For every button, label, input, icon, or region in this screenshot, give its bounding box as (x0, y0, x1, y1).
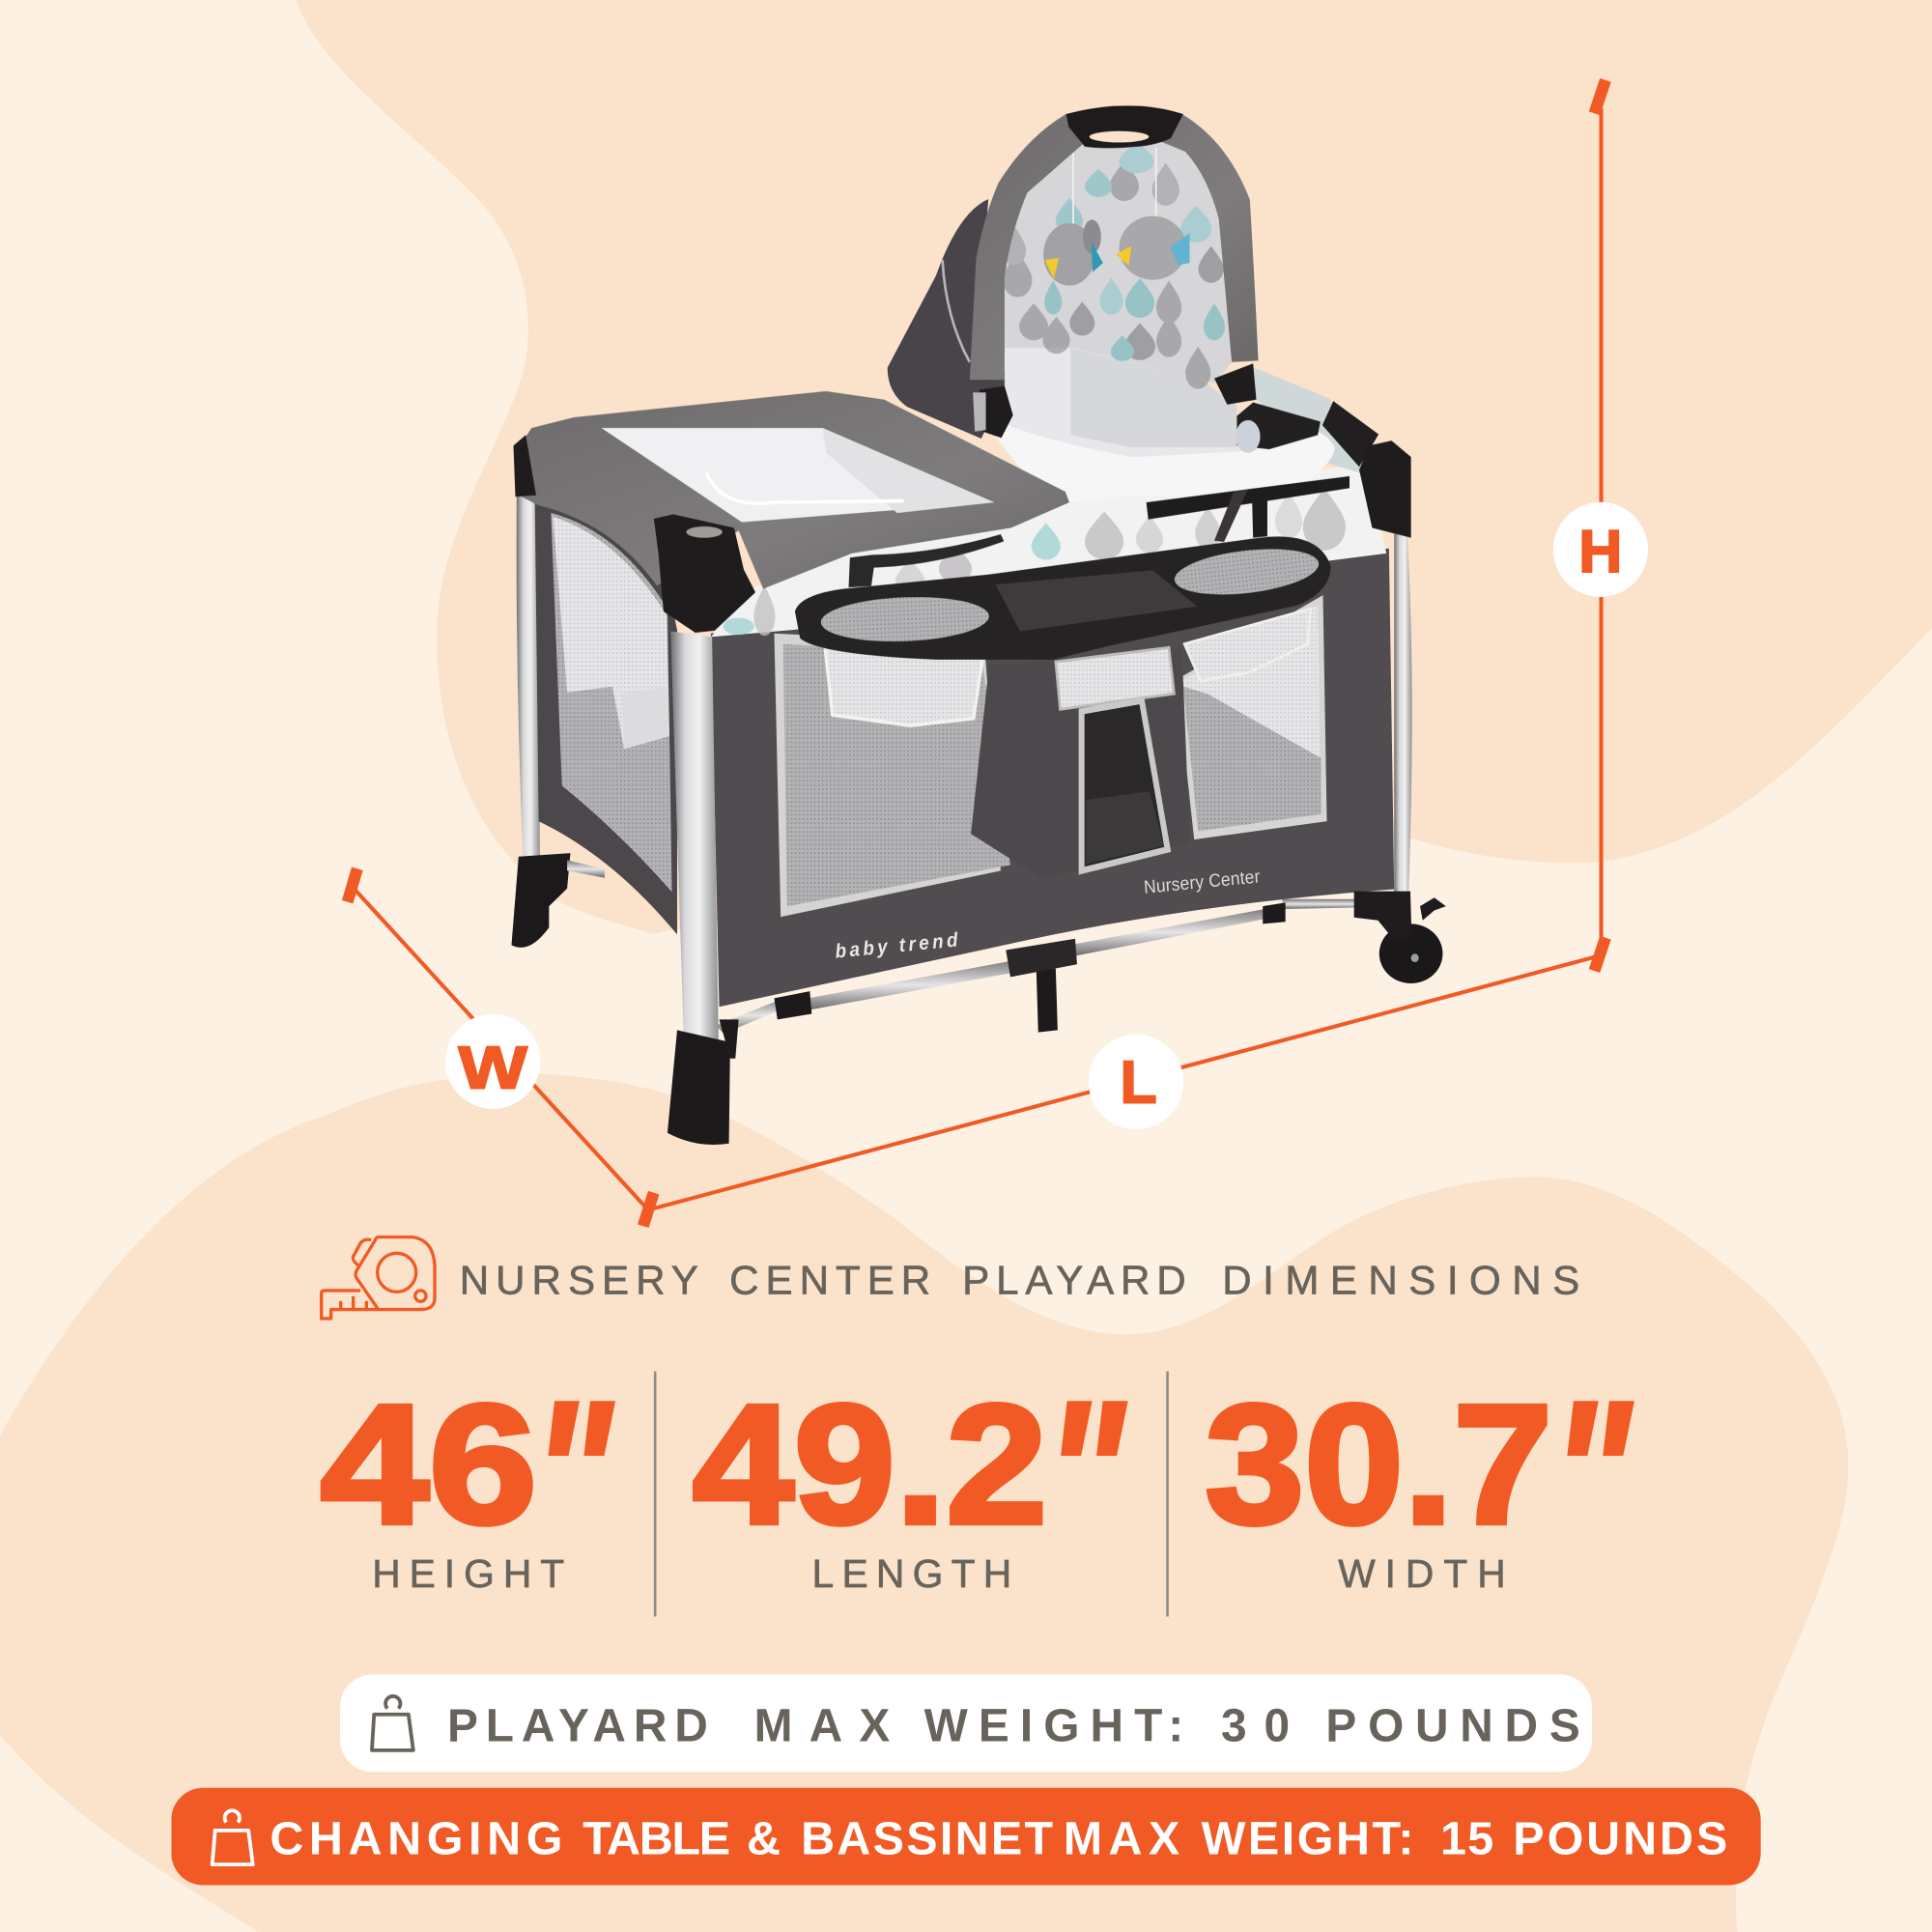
bar: changing table max weight: MAX (1064, 1813, 1186, 1865)
bassinet bar (1147, 476, 1350, 542)
basket right (1184, 609, 1311, 681)
far right leg (1394, 530, 1412, 899)
front corner cap (654, 514, 755, 633)
brand label: baby trend: baby trend (835, 929, 959, 963)
front fabric panel (711, 549, 1394, 1007)
arch brackets (973, 363, 1378, 467)
right corner cap (1359, 440, 1411, 538)
badge: L (1089, 1035, 1183, 1129)
icon: weight (372, 1696, 413, 1750)
divider (1166, 1372, 1169, 1616)
teal fabric right (1246, 367, 1363, 474)
rear rod (567, 860, 605, 878)
heading: PLAYARD (962, 1257, 1193, 1302)
corner highlight (686, 526, 723, 538)
side panel (535, 496, 677, 934)
front foot (668, 1030, 730, 1145)
bar: playard max weight: 30 (1221, 1700, 1307, 1751)
mesh window left (774, 634, 1010, 917)
badge: H (1553, 502, 1648, 597)
storage tray (795, 536, 1331, 660)
front leg (670, 632, 719, 1042)
icon: tape measure (322, 1237, 435, 1319)
badge: L: L (1120, 1049, 1157, 1117)
bar: playard max weight: WEIGHT: (924, 1700, 1194, 1751)
measurement: width: 30.7 (1205, 1371, 1552, 1560)
canopy fabric (1003, 141, 1232, 389)
measurement: length (693, 1357, 1127, 1596)
bar: changing table max weight: POUNDS (1513, 1813, 1730, 1865)
measurement: width: " (1550, 1357, 1634, 1591)
changing table (515, 391, 1069, 589)
measurement: width (1205, 1357, 1634, 1596)
measurement: height: HEIGHT (372, 1551, 564, 1596)
heading: NURSERY (460, 1257, 705, 1302)
center foot (1006, 939, 1077, 1033)
badge: W: W (458, 1034, 527, 1101)
badge: H: H (1578, 518, 1622, 585)
center pouch (971, 647, 1190, 879)
measurement: width: WIDTH (1338, 1551, 1506, 1596)
bar: changing table max weight: CHANGING (270, 1813, 568, 1865)
plush toys (1043, 216, 1190, 286)
mesh window right (1177, 595, 1327, 839)
canopy arch (970, 114, 1259, 380)
badge: W (445, 1014, 540, 1109)
measurement: height: 46 (321, 1371, 537, 1560)
bar: changing table max weight (171, 1788, 1761, 1886)
heading: DIMENSIONS (1222, 1257, 1591, 1302)
bar: changing table max weight: BASSINET (801, 1813, 1055, 1865)
patterned fabric band (711, 464, 1386, 637)
bar: playard max weight: MAX (754, 1700, 907, 1751)
product photo: playard (511, 105, 1446, 1145)
tray strut (848, 534, 1004, 587)
bar: playard max weight: POUNDS (1325, 1700, 1591, 1751)
canopy hood (888, 199, 1008, 439)
basket left (825, 644, 982, 725)
measurement: length: LENGTH (812, 1551, 1011, 1596)
far left leg (517, 496, 540, 860)
bar: changing table max weight: WEIGHT: (1202, 1813, 1416, 1865)
bottom rods (716, 899, 1356, 1034)
dimension line: width (348, 868, 654, 1226)
dimension line: height (1595, 80, 1605, 971)
measurement: height: " (531, 1357, 615, 1591)
brand label: Nursery Center: Nursery Center (1143, 866, 1261, 897)
measurement: length: 49.2 (693, 1371, 1047, 1560)
bar: playard max weight (340, 1674, 1592, 1772)
divider (654, 1372, 656, 1616)
mobile strings (1073, 148, 1156, 230)
background blob: top (296, 0, 1932, 934)
rear left corner (513, 435, 536, 497)
background blob: bottom (0, 1074, 1848, 1932)
measurement: height (321, 1357, 615, 1596)
icon: weight (213, 1810, 253, 1864)
bassinet bowl (975, 345, 1335, 509)
measurement: length: " (1043, 1357, 1127, 1591)
wheel (1354, 892, 1446, 983)
bar: changing table max weight: & (747, 1813, 781, 1865)
rear foot (511, 853, 570, 948)
bar: changing table max weight: TABLE (582, 1813, 729, 1865)
handle (1066, 105, 1183, 148)
heading: CENTER (729, 1257, 937, 1302)
bar: playard max weight: PLAYARD (447, 1700, 716, 1751)
dimension line: length (648, 956, 1598, 1210)
bar: changing table max weight: 15 (1440, 1813, 1495, 1865)
front bracket (720, 1019, 739, 1059)
